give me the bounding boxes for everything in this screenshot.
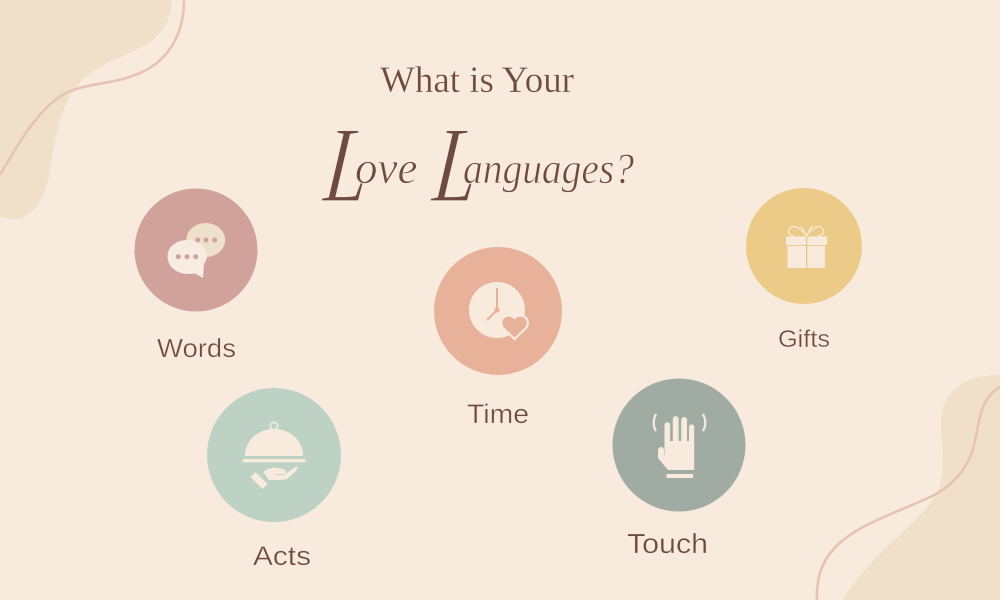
title: Love Languages? <box>318 106 634 225</box>
icon: serving cloche on hand <box>242 422 306 489</box>
icon: speech bubbles <box>168 223 225 278</box>
item: Gifts <box>746 188 862 353</box>
item: Words <box>134 188 258 363</box>
icon: gift box <box>786 226 827 268</box>
label: Gifts: Gifts <box>778 326 830 353</box>
label: Touch: Touch <box>627 528 708 559</box>
circle: Touch <box>612 378 746 512</box>
title: Love Languages?: ove <box>355 143 417 193</box>
title: Love Languages?: anguages? <box>463 146 634 193</box>
title: What is Your: What is Your <box>380 60 574 101</box>
circle: Gifts <box>746 188 862 304</box>
title: Love Languages?: L <box>427 106 484 225</box>
label: Acts: Acts <box>253 541 311 571</box>
circle: Words <box>134 188 258 312</box>
top-left decorative blob and curve <box>0 0 184 219</box>
label: Words: Words <box>157 333 236 363</box>
item: Touch <box>612 378 746 559</box>
icon: hand <box>654 414 705 478</box>
item: Time <box>434 247 562 429</box>
label: Time: Time <box>467 399 529 429</box>
title: Love Languages?: L <box>318 106 375 225</box>
icon: clock with heart <box>469 282 528 339</box>
circle: Time <box>434 247 562 375</box>
circle: Acts <box>207 388 341 522</box>
item: Acts <box>207 388 341 571</box>
bottom-right decorative blob and curve <box>817 375 1000 600</box>
